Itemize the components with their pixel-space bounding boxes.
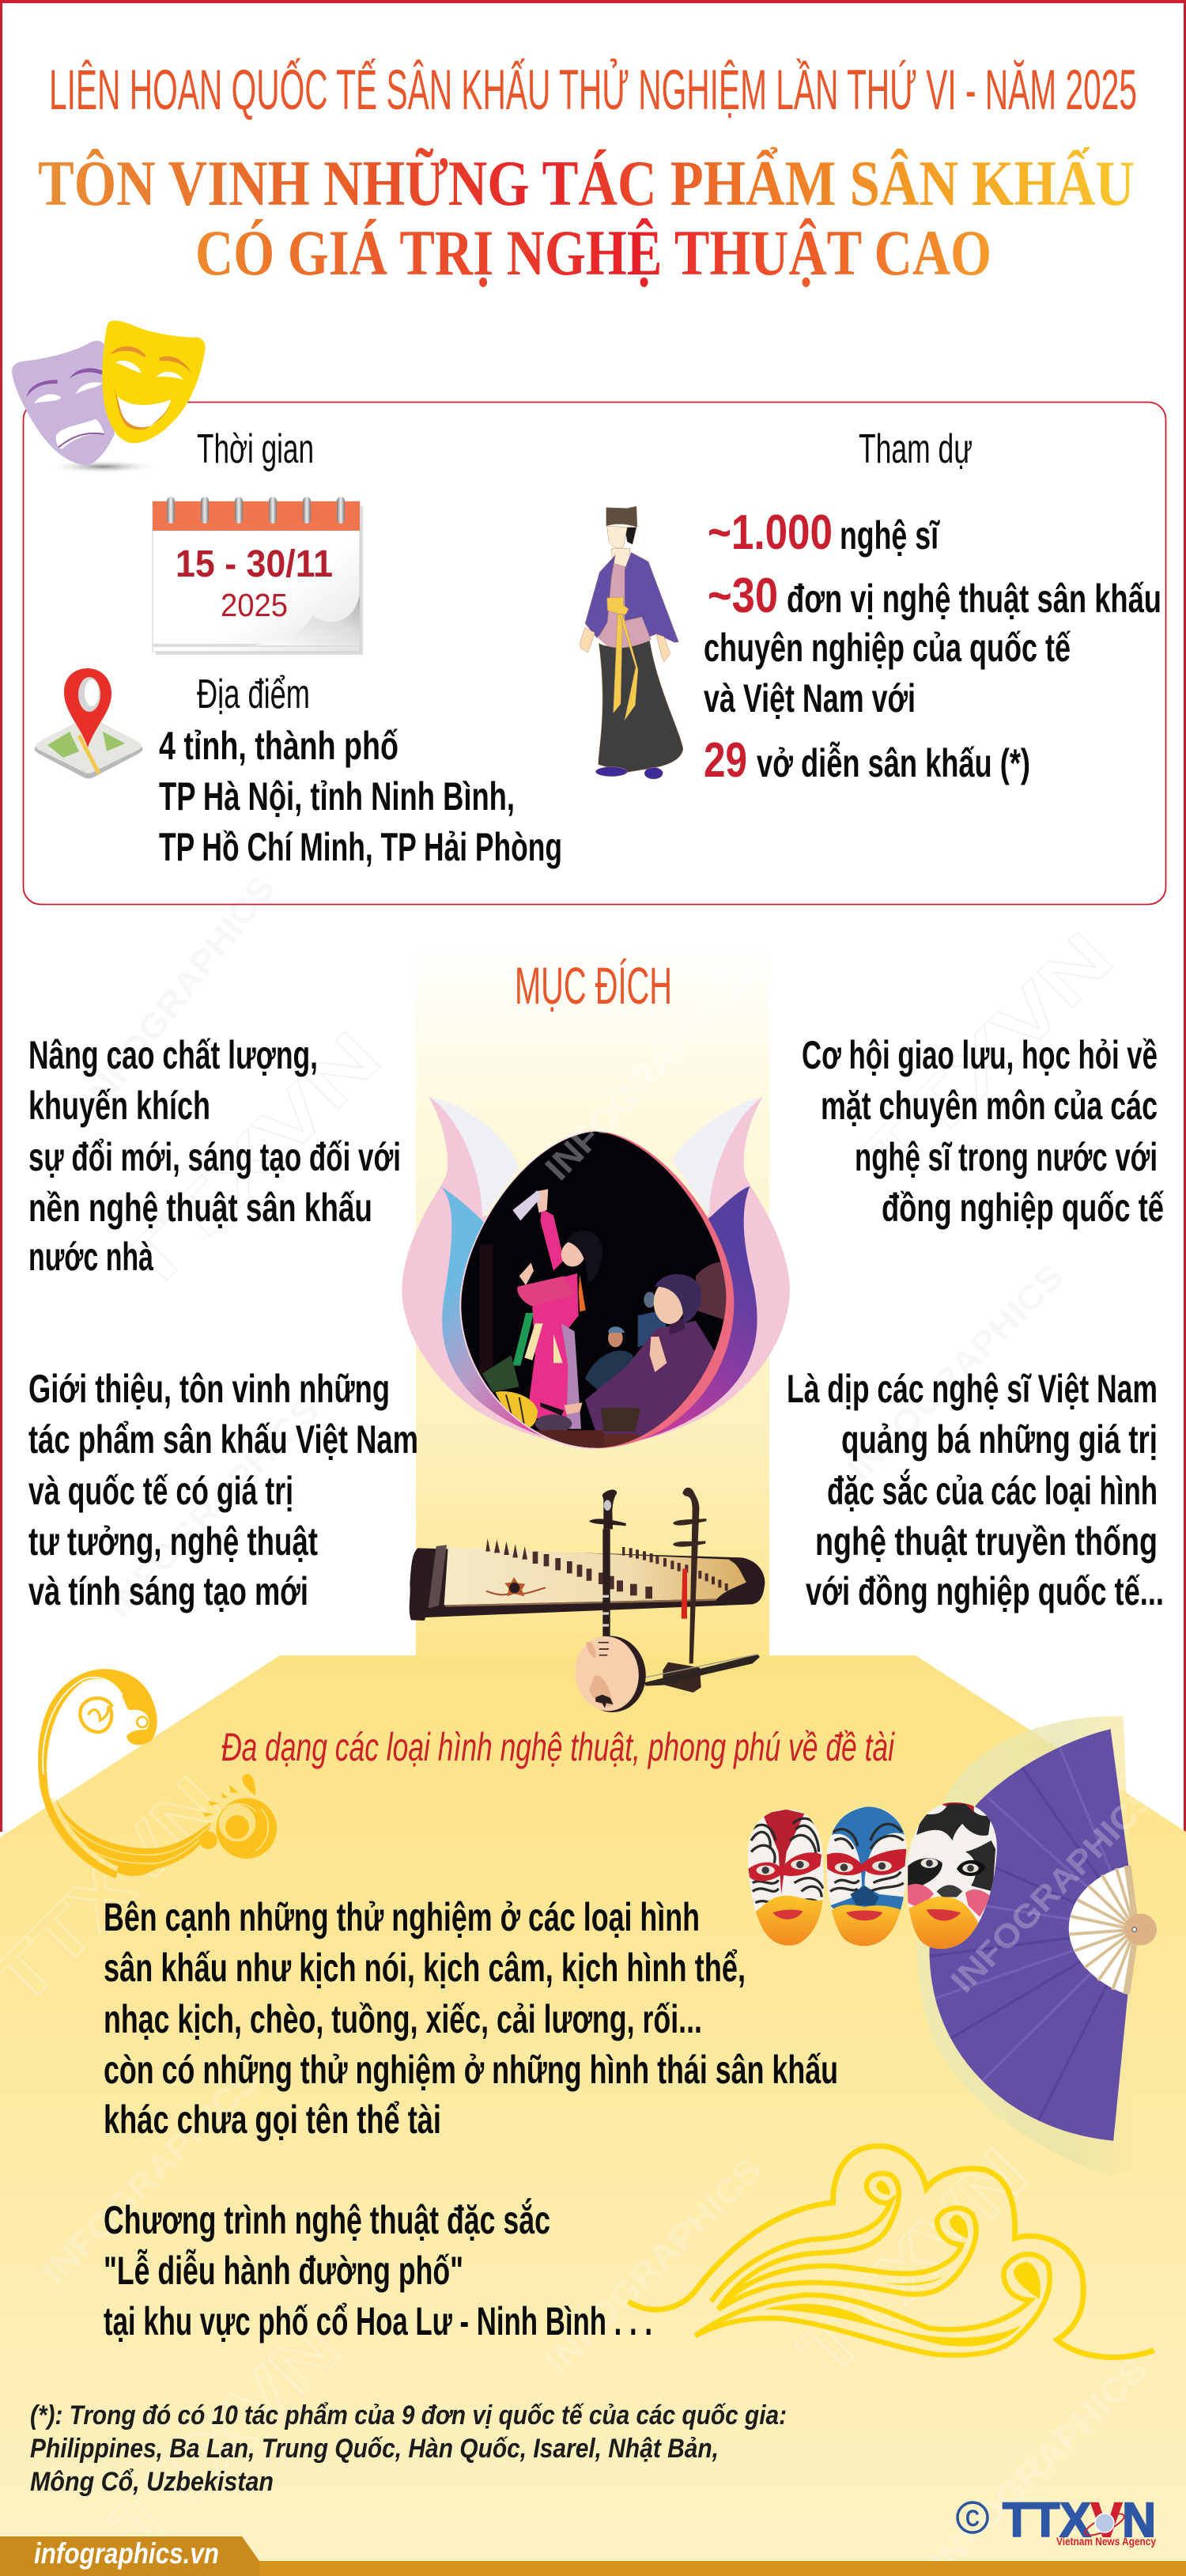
footer band with site name: infographics.vn	[34, 2537, 219, 2570]
text: purpose top left	[28, 1033, 401, 1279]
watermark: INFOGRAPHICS	[35, 2060, 266, 2292]
text: street parade programme: Chương trình nghệ thuật đặc sắc	[104, 2198, 550, 2242]
illustration: lotus frame with stage photo	[402, 1079, 790, 1450]
title: main headline	[38, 147, 1135, 289]
text: attendance figures	[704, 505, 1161, 788]
text: venue details: TP Hà Nội, tỉnh Ninh Bình,	[159, 774, 515, 819]
title: main headline: CÓ GIÁ TRỊ NGHỆ THUẬT CAO	[195, 217, 991, 289]
icon: calendar with dates: 2025	[221, 587, 288, 623]
text: experimental forms: Bên cạnh những thử nghiệm ở các loại hình	[104, 1895, 700, 1939]
text: purpose top left: Nâng cao chất lượng,	[28, 1033, 318, 1077]
text: venue details: TP Hồ Chí Minh, TP Hải Phòng	[159, 825, 562, 869]
zither	[410, 1538, 765, 1621]
text: purpose bottom left: và quốc tế có giá trị	[28, 1469, 293, 1513]
text: footnote: Philippines, Ba Lan, Trung Quốc, Hàn Quốc, Isarel, Nhật Bản,	[30, 2434, 719, 2464]
text: purpose bottom left: tác phẩm sân khấu Việt Nam	[28, 1417, 418, 1462]
text: attendance figures: và Việt Nam với	[704, 676, 916, 721]
text: footnote	[30, 2400, 787, 2497]
watermark: TTXVN	[104, 1016, 396, 1308]
text: attendance figures: ~1.000	[708, 505, 833, 560]
watermark: INFOGRAPHICS	[840, 1257, 1071, 1488]
watermark: INFOGRAPHICS	[74, 868, 283, 1120]
text: time label: Thời gian	[197, 426, 314, 472]
illustration: fan and opera masks	[744, 1716, 1163, 2177]
text: purpose top right	[802, 1033, 1164, 1230]
text: experimental forms: khác chưa gọi tên thể tài	[104, 2097, 441, 2142]
text: purpose top left: khuyến khích	[28, 1084, 210, 1128]
text: attendance figures: ~30	[708, 569, 778, 623]
footer band with site name	[0, 2536, 1186, 2576]
panel: event information box	[24, 402, 1165, 905]
icon: calendar with dates: 15 - 30/11	[176, 543, 333, 585]
text: street parade programme: "Lễ diễu hành đường phố"	[104, 2249, 463, 2293]
text: purpose bottom right	[787, 1367, 1164, 1613]
ornament: golden curl	[38, 1669, 277, 1878]
text: venue details	[159, 671, 562, 869]
text: attendance label: Tham dự	[859, 426, 973, 472]
watermark: INFOGRAPHICS	[538, 2150, 769, 2381]
text: purpose bottom left: tư tưởng, nghệ thuật	[28, 1519, 318, 1564]
watermark	[0, 868, 1155, 2576]
text: purpose top left: nền nghệ thuật sân khấu	[28, 1186, 372, 1230]
text: venue details: Địa điểm	[197, 671, 310, 717]
text: purpose top left: sự đổi mới, sáng tạo đối với	[28, 1135, 401, 1179]
purpose column background	[416, 941, 769, 1657]
watermark: TTXVN	[848, 917, 1128, 1197]
purple fan	[928, 1729, 1157, 2141]
text: purpose bottom left: Giới thiệu, tôn vinh những	[28, 1367, 390, 1411]
text: experimental forms: nhạc kịch, chèo, tuồng, xiếc, cải lương, rối...	[104, 1997, 702, 2041]
logo: TTXVN: TTXVN	[1003, 2493, 1156, 2547]
text: attendance figures: nghệ sĩ	[840, 513, 940, 558]
red page border	[0, 0, 1186, 1832]
illustration: traditional instruments	[410, 1488, 765, 1717]
heading: purpose: MỤC ĐÍCH	[515, 956, 672, 1015]
text: purpose top left: nước nhà	[28, 1235, 153, 1279]
icon: calendar with dates	[153, 497, 363, 655]
text: footnote: (*): Trong đó có 10 tác phẩm của 9 đơn vị quốc tế của các quốc gia:	[30, 2400, 787, 2430]
watermark: TTXVN	[96, 2307, 355, 2566]
icon: theatre masks	[12, 320, 206, 474]
text: street parade programme: tại khu vực phố cổ Hoa Lư - Ninh Bình . . .	[104, 2299, 652, 2343]
text: purpose bottom left: và tính sáng tạo mới	[28, 1569, 308, 1613]
illustration: lotus frame with stage photo: INFOGRAPHICS	[538, 955, 765, 1188]
text: attendance figures: vở diễn sân khấu (*)	[757, 741, 1030, 785]
text: attendance figures: 29	[704, 733, 747, 788]
watermark: INFOGRAPHICS	[99, 1390, 327, 1625]
watermark: INFOGRAPHICS	[923, 2350, 1155, 2576]
text: footnote: Mông Cổ, Uzbekistan	[30, 2467, 274, 2497]
opera mask: black and white	[905, 1801, 1000, 1950]
text: purpose bottom left	[28, 1367, 418, 1613]
icon: location pin on map	[35, 668, 142, 778]
text: experimental forms: còn có những thử nghiệm ở những hình thái sân khấu	[104, 2048, 838, 2092]
subheading: diversity of art forms: Đa dạng các loại hình nghệ thuật, phong phú về đề tài	[221, 1725, 895, 1769]
moon lute	[570, 1490, 651, 1717]
text: venue details: 4 tỉnh, thành phố	[159, 724, 398, 768]
ornament: golden cloud	[628, 2146, 1154, 2357]
opera mask: red	[748, 1810, 824, 1946]
lower yellow panel background	[0, 1655, 1186, 2576]
text: experimental forms	[104, 1895, 838, 2142]
text: experimental forms: sân khấu như kịch nói, kịch câm, kịch hình thể,	[104, 1946, 746, 1990]
illustration: fan and opera masks: INFOGRAPHICS	[944, 1780, 1163, 2000]
opera mask: blue	[825, 1804, 909, 1950]
curl highlights	[43, 1678, 210, 1863]
two-string fiddle	[644, 1488, 760, 1693]
icon: performer in traditional costume	[580, 506, 683, 779]
logo: TTXVN: C	[965, 2506, 980, 2532]
text: street parade programme	[104, 2198, 652, 2343]
logo: TTXVN: Vietnam News Agency	[1056, 2536, 1156, 2548]
watermark: TTXVN	[784, 2133, 1043, 2392]
